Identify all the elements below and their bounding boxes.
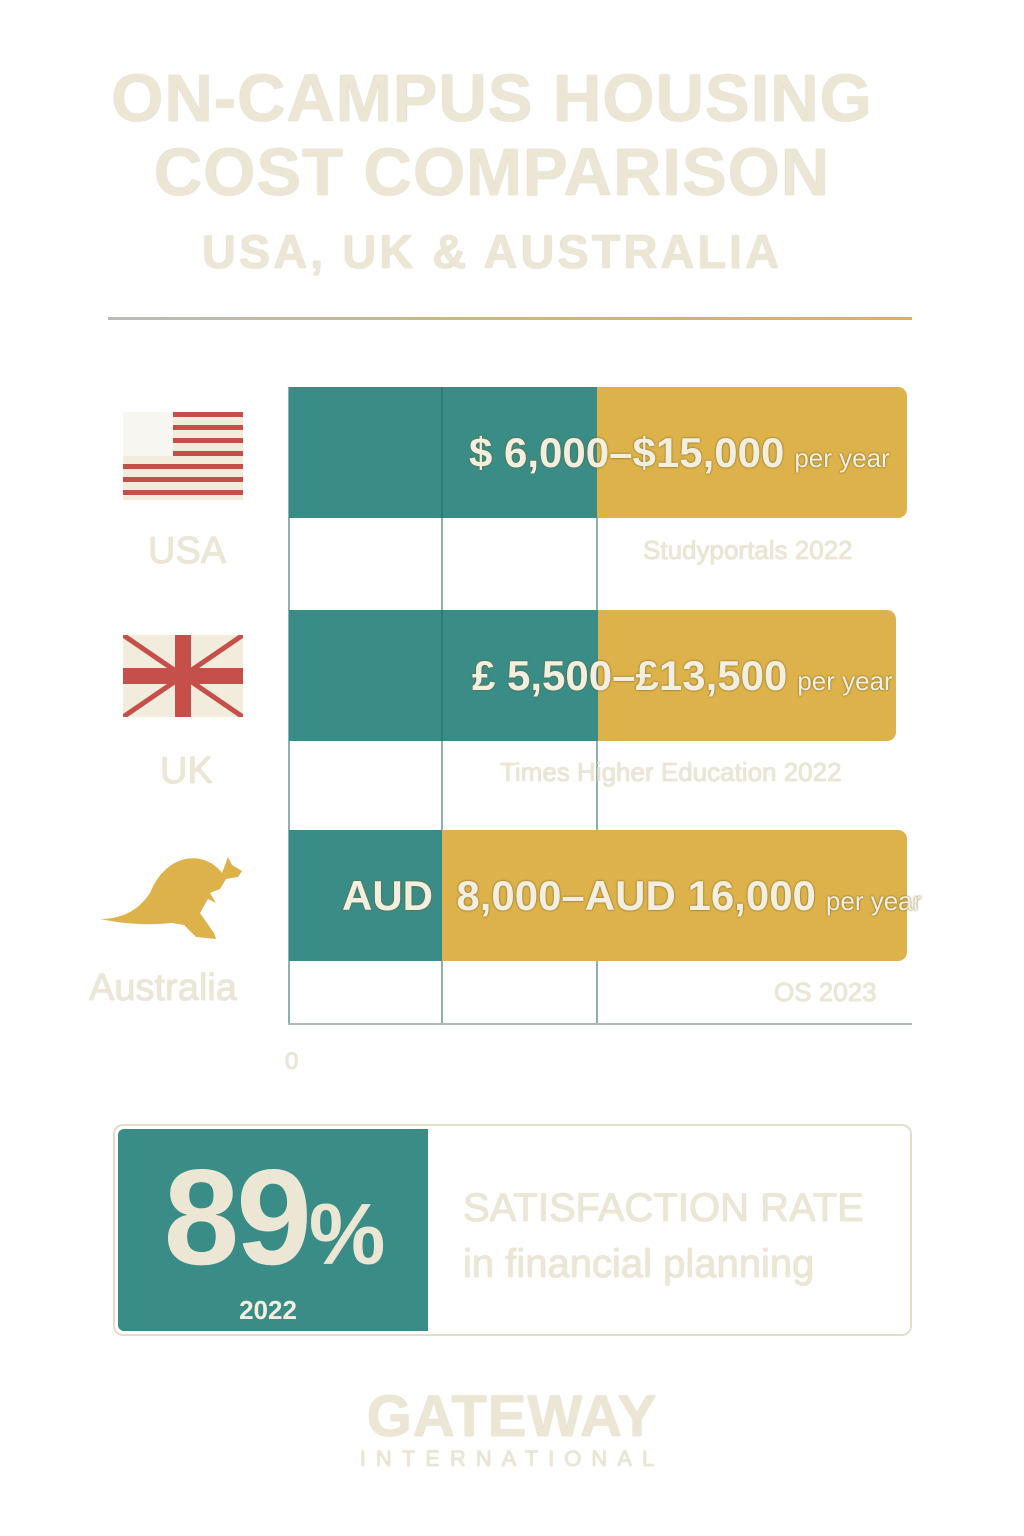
- stat description: [463, 1186, 864, 1286]
- title: [111, 61, 873, 210]
- stat number: [118, 1129, 428, 1331]
- title: COST COMPARISON: [154, 135, 830, 210]
- bar: USA: per year: [794, 443, 890, 473]
- bar: UK: £ 5,500–£13,500: [472, 652, 787, 698]
- chart: [285, 387, 922, 1075]
- bar: USA: [289, 387, 907, 518]
- stat panel: [113, 1124, 912, 1336]
- source: UK: Times Higher Education 2022: [500, 757, 842, 787]
- label: USA: USA: [148, 530, 226, 572]
- icon: UK flag: [123, 635, 243, 717]
- icon: kangaroo: [100, 857, 242, 939]
- stat description: SATISFACTION RATE: [463, 1186, 864, 1230]
- axis zero label: 0: [285, 1048, 298, 1075]
- bar: Australia: AUD 8,000–AUD 16,000: [342, 872, 816, 918]
- stat number: 2022: [239, 1295, 297, 1325]
- bar: USA: $ 6,000–$15,000: [469, 428, 784, 476]
- logo: GATEWAY: [367, 1384, 657, 1449]
- label: UK: UK: [160, 750, 213, 792]
- bar: Australia: [289, 830, 922, 961]
- source: USA: Studyportals 2022: [643, 535, 853, 565]
- logo: INTERNATIONAL: [360, 1446, 664, 1471]
- bar: UK: [289, 610, 896, 741]
- subtitle: USA, UK & AUSTRALIA: [202, 225, 782, 278]
- stat number: 89%: [164, 1141, 382, 1293]
- stat description: in financial planning: [463, 1242, 814, 1286]
- source: Australia: OS 2023: [774, 977, 877, 1007]
- label: Australia: Australia: [89, 967, 237, 1009]
- title: ON-CAMPUS HOUSING: [111, 61, 873, 136]
- divider rule: [108, 317, 912, 320]
- icon: USA flag: [123, 412, 243, 500]
- bar: Australia: per year: [826, 886, 921, 916]
- bar: UK: per year: [797, 666, 893, 696]
